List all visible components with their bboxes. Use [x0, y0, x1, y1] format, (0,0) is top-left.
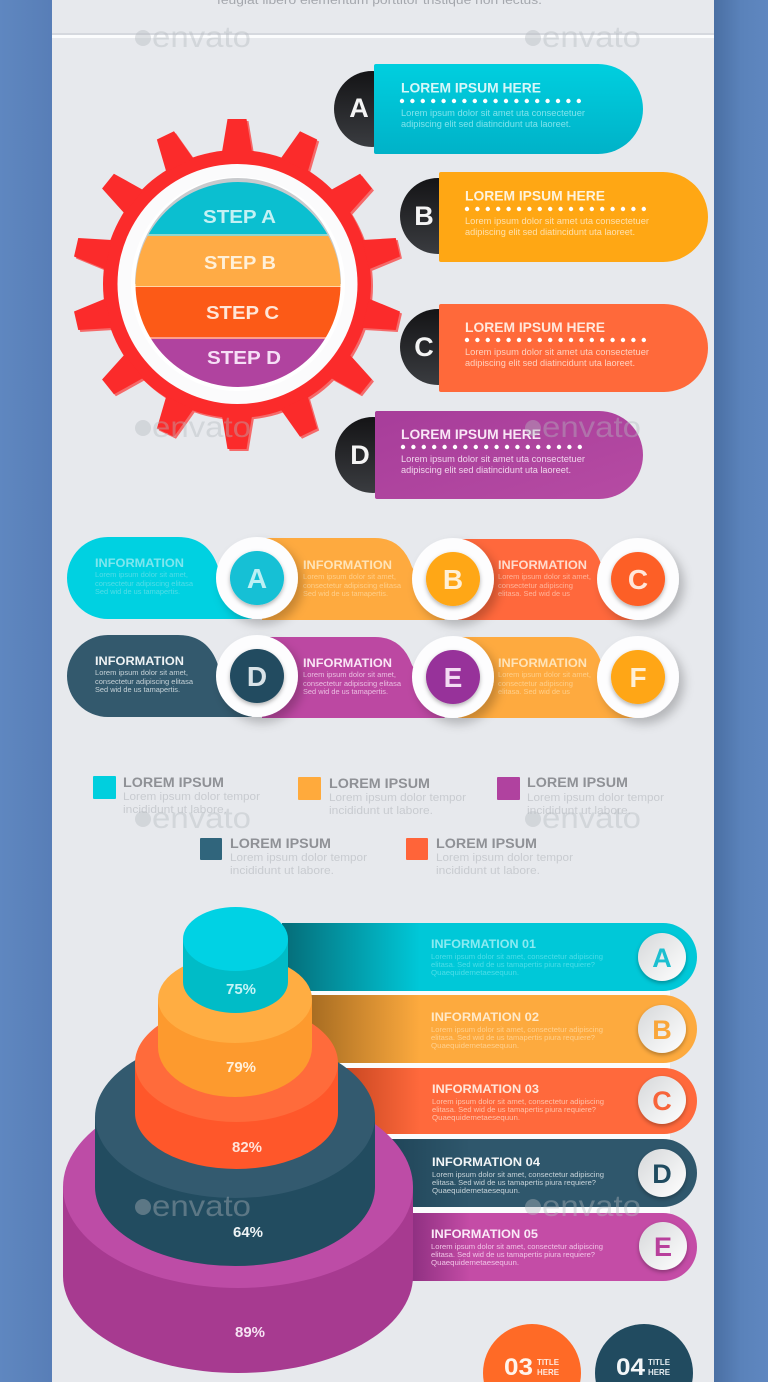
step bands	[136, 182, 340, 387]
legend item cyan: LOREM IPSUM	[123, 775, 224, 790]
segment: cyan information: consectetur adipiscing elitasa	[95, 579, 194, 588]
segment: orange information: consectetur adipiscing elitasa	[303, 581, 402, 590]
bar 05: INFORMATION 05	[431, 1229, 539, 1241]
gear diagram	[73, 119, 403, 451]
information bars	[282, 923, 697, 1281]
step labels: STEP B	[204, 253, 276, 273]
bar 01: A	[652, 943, 672, 973]
divider band	[52, 33, 714, 38]
bar 04: D	[652, 1159, 672, 1189]
segment: cyan information: INFORMATION	[95, 558, 184, 570]
legend item dark: Lorem ipsum dolor tempor	[230, 852, 367, 864]
step labels: STEP C	[206, 303, 279, 323]
bar 04: INFORMATION 04	[432, 1157, 541, 1169]
step card B	[400, 172, 708, 262]
badge ring B	[412, 538, 494, 620]
badge ring C	[597, 538, 679, 620]
watermark: envato: envato	[152, 21, 251, 54]
segment: cyan information	[67, 537, 252, 619]
step card D	[335, 411, 643, 499]
stacked cylinder chart	[63, 907, 413, 1373]
legend item dark: LOREM IPSUM	[230, 836, 331, 851]
step card C: Lorem ipsum dolor sit amet uta consectetuer	[465, 347, 649, 357]
title circle 04	[595, 1324, 693, 1382]
step card A	[334, 64, 643, 154]
bar 01: elitasa. Sed wid de us tamapertis piura requiere?	[431, 960, 595, 969]
legend item cyan: Lorem ipsum dolor tempor	[123, 791, 260, 803]
watermark: envato: envato	[542, 1190, 641, 1223]
segment: red-orange information: consectetur adipiscing	[498, 581, 573, 590]
legend item orange: Lorem ipsum dolor tempor	[329, 792, 466, 804]
bar 03: INFORMATION 03	[432, 1084, 539, 1096]
title circle 03: TITLE	[537, 1357, 559, 1367]
gear depth edge	[75, 121, 403, 451]
segment: purple information: INFORMATION	[303, 658, 392, 670]
step card D: LOREM IPSUM HERE	[401, 426, 541, 442]
watermark: envato: envato	[152, 411, 251, 444]
legend item dark: incididunt ut labore.	[230, 865, 334, 877]
step card A: LOREM IPSUM HERE	[401, 80, 541, 96]
letter badge D	[335, 417, 411, 493]
step card B: Lorem ipsum dolor sit amet uta consectetuer	[465, 216, 649, 226]
segment: dark information: Sed wid de us tamapertis.	[95, 685, 180, 694]
badge ring F: F	[629, 662, 647, 693]
step card C: adipiscing elit sed diatincidunt uta laoreet.	[465, 358, 635, 368]
bar 02: Quaequidemetaesequun.	[431, 1041, 519, 1050]
watermark: envato: envato	[152, 802, 251, 835]
segment: cyan information: Lorem ipsum dolor sit amet,	[95, 570, 188, 579]
step card B: adipiscing elit sed diatincidunt uta laoreet.	[465, 227, 635, 237]
badge ring A	[216, 537, 298, 619]
legend item cyan	[93, 775, 260, 816]
tier: dark 64%: 64%	[233, 1224, 263, 1241]
tier: cyan 75%: 75%	[226, 981, 256, 998]
bar 02: Lorem ipsum dolor sit amet, consectetur adipiscing	[431, 1025, 603, 1034]
segment: dark information: consectetur adipiscing elitasa	[95, 677, 194, 686]
badge ring D: D	[247, 661, 267, 692]
step card A: Lorem ipsum dolor sit amet uta consectetuer	[401, 108, 585, 118]
bar 03: Lorem ipsum dolor sit amet, consectetur adipiscing	[432, 1097, 604, 1106]
bar 02	[300, 995, 697, 1063]
segment: orange information: Lorem ipsum dolor sit amet,	[303, 572, 396, 581]
bar 03: Quaequidemetaesequun.	[432, 1113, 520, 1122]
title circle 04: 04	[616, 1354, 646, 1381]
bar 05	[400, 1213, 697, 1281]
badge ring F	[597, 636, 679, 718]
bar 04	[360, 1139, 697, 1207]
step card D: adipiscing elit sed diatincidunt uta laoreet.	[401, 465, 571, 475]
white ring	[118, 164, 358, 404]
letter badge A	[334, 71, 410, 147]
step labels	[203, 207, 281, 368]
segment: orange information: Sed wid de us tamapertis.	[303, 589, 388, 598]
legend item orange	[298, 776, 466, 817]
letter badge C: C	[414, 332, 434, 362]
tier: purple 89%	[63, 1086, 413, 1373]
step card C: LOREM IPSUM HERE	[465, 319, 605, 335]
letter badge C	[400, 309, 476, 385]
bar 05: elitasa. Sed wid de us tamapertis piura requiere?	[431, 1250, 595, 1259]
segment: red-orange information: Lorem ipsum dolor sit amet,	[498, 572, 591, 581]
legend item red-orange: LOREM IPSUM	[436, 836, 537, 851]
badge ring A: A	[247, 563, 267, 594]
legend item dark	[200, 836, 367, 877]
bar 04: elitasa. Sed wid de us tamapertis piura requiere?	[432, 1178, 596, 1187]
legend item purple: LOREM IPSUM	[527, 775, 628, 790]
legend item red-orange: incididunt ut labore.	[436, 865, 540, 877]
bar separators	[300, 990, 670, 1214]
segment: light orange information: elitasa. Sed wid de us	[498, 687, 570, 696]
bar 02: INFORMATION 02	[431, 1012, 539, 1024]
legend item purple: incididunt ut labore.	[527, 805, 631, 817]
segment: red-orange information: INFORMATION	[498, 560, 587, 572]
bar 02: elitasa. Sed wid de us tamapertis piura requiere?	[431, 1033, 595, 1042]
bar 05: E	[654, 1232, 672, 1262]
segment: red-orange information: elitasa. Sed wid de us	[498, 589, 570, 598]
title circle 04: HERE	[648, 1367, 670, 1377]
segment: purple information	[262, 637, 445, 718]
tier: dark 64%	[95, 1036, 375, 1266]
bar 05: Lorem ipsum dolor sit amet, consectetur adipiscing	[431, 1242, 603, 1251]
letter badge B: B	[414, 201, 434, 231]
bar 03: C	[652, 1086, 672, 1116]
tier: red-orange 82%: 82%	[232, 1139, 262, 1156]
tier: cyan 75%	[183, 907, 288, 1013]
segment: orange information	[262, 538, 445, 620]
bar 04: Lorem ipsum dolor sit amet, consectetur adipiscing	[432, 1170, 604, 1179]
tier: purple 89%: 89%	[235, 1324, 265, 1341]
segment: purple information: consectetur adipiscing elitasa	[303, 679, 402, 688]
information row 2	[67, 635, 679, 718]
step card D: Lorem ipsum dolor sit amet uta consectetuer	[401, 454, 585, 464]
gear body	[73, 119, 401, 449]
bar 01	[282, 923, 697, 991]
tier: orange 79%	[158, 955, 312, 1097]
step labels: STEP D	[207, 348, 281, 368]
segment: light orange information	[458, 637, 635, 718]
watermark: envato: envato	[542, 411, 641, 444]
watermark: envato	[135, 21, 641, 1223]
title circle 04: TITLE	[648, 1357, 670, 1367]
segment: red-orange information	[458, 539, 635, 620]
letter badge D: D	[350, 440, 370, 470]
segment: orange information: INFORMATION	[303, 560, 392, 572]
segment: purple information: Sed wid de us tamapertis.	[303, 687, 388, 696]
bar 01: Quaequidemetaesequun.	[431, 968, 519, 977]
legend item red-orange: Lorem ipsum dolor tempor	[436, 852, 573, 864]
step card B: LOREM IPSUM HERE	[465, 188, 605, 204]
title circle 03: HERE	[537, 1367, 559, 1377]
bar 03	[320, 1068, 697, 1134]
letter badge B	[400, 178, 476, 254]
watermark: envato: envato	[542, 21, 641, 54]
segment: dark information	[67, 635, 252, 717]
watermark: envato: envato	[152, 1190, 251, 1223]
badge ring B: B	[443, 564, 463, 595]
badge ring C: C	[628, 564, 648, 595]
legend item orange: LOREM IPSUM	[329, 776, 430, 791]
tier: red-orange 82%	[135, 1004, 338, 1169]
bar 05: Quaequidemetaesequun.	[431, 1258, 519, 1267]
bar 04: Quaequidemetaesequun.	[432, 1186, 520, 1195]
legend item orange: incididunt ut labore.	[329, 805, 433, 817]
badge ring E: E	[444, 662, 462, 693]
segment: light orange information: consectetur adipiscing	[498, 679, 573, 688]
legend item red-orange	[406, 836, 573, 877]
step card C	[400, 304, 708, 392]
letter badge A: A	[349, 93, 369, 123]
bar 02: B	[652, 1015, 672, 1045]
segment: purple information: Lorem ipsum dolor sit amet,	[303, 670, 396, 679]
segment: light orange information: INFORMATION	[498, 658, 587, 670]
title circle 03	[483, 1324, 581, 1382]
segment: cyan information: Sed wid de us tamapertis.	[95, 587, 180, 596]
step card A: adipiscing elit sed diatincidunt uta laoreet.	[401, 119, 571, 129]
legend	[93, 775, 664, 877]
segment: light orange information: Lorem ipsum dolor sit amet,	[498, 670, 591, 679]
legend item purple: Lorem ipsum dolor tempor	[527, 792, 664, 804]
title circle 03: 03	[504, 1354, 533, 1381]
badge ring D	[216, 635, 298, 717]
step labels: STEP A	[203, 207, 276, 227]
legend item purple	[497, 775, 664, 817]
segment: dark information: Lorem ipsum dolor sit amet,	[95, 668, 188, 677]
tier: orange 79%: 79%	[226, 1059, 256, 1076]
bar 01: INFORMATION 01	[431, 939, 537, 951]
bar 01: Lorem ipsum dolor sit amet, consectetur adipiscing	[431, 952, 603, 961]
watermark: envato: envato	[542, 802, 641, 835]
legend item cyan: incididunt ut labore.	[123, 804, 227, 816]
badge ring E	[412, 636, 494, 718]
bar 03: elitasa. Sed wid de us tamapertis piura requiere?	[432, 1105, 596, 1114]
information row 1	[67, 537, 679, 620]
segment: dark information: INFORMATION	[95, 656, 184, 668]
